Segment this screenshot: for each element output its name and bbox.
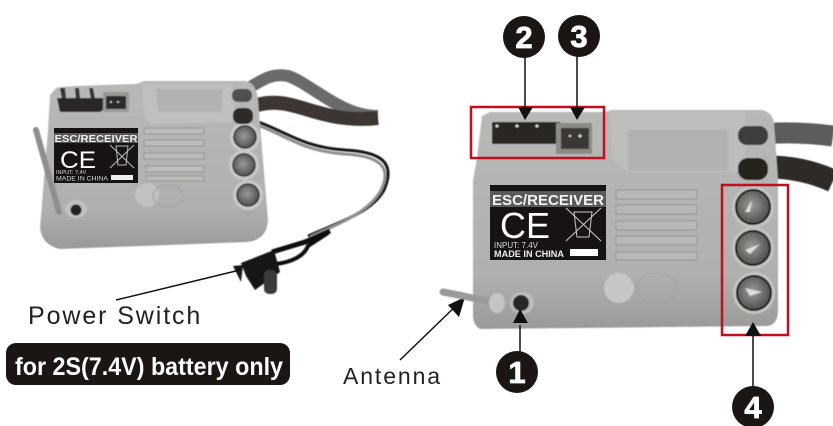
callout 1	[496, 309, 538, 393]
right device body	[473, 110, 778, 329]
left wire stubs	[232, 89, 253, 124]
right label	[490, 185, 606, 260]
right device wires	[745, 133, 833, 181]
callout 3	[558, 15, 600, 120]
callout 2	[503, 16, 545, 120]
left round button	[135, 183, 183, 207]
right connector pins	[492, 122, 592, 154]
right label: ESC/RECEIVER	[492, 192, 604, 209]
battery badge: for 2S(7.4V) battery only	[15, 353, 283, 381]
antenna caption: Antenna	[343, 363, 442, 389]
left top cover block	[142, 84, 235, 124]
callout 1: 1	[508, 355, 526, 390]
arrow: power switch pointer	[116, 270, 240, 300]
left antenna	[36, 130, 87, 218]
right label: MADE IN CHINA	[494, 249, 565, 259]
right device: receiver detail	[443, 110, 833, 329]
left device wires	[238, 75, 388, 264]
battery badge	[6, 343, 290, 385]
arrow: antenna pointer	[400, 297, 465, 360]
red box: LEDs	[722, 185, 788, 335]
callout 2: 2	[515, 20, 533, 55]
right label: CE	[500, 205, 550, 246]
right antenna and power socket	[443, 292, 534, 314]
right label: INPUT: 7.4V	[494, 241, 539, 250]
left label: ESC/RECEIVER	[54, 133, 138, 145]
callout 4: 4	[744, 390, 762, 425]
callout 4	[732, 322, 774, 426]
right LEDs	[732, 186, 775, 314]
left label: INPUT: 7.4V	[56, 170, 87, 176]
power switch	[233, 250, 280, 294]
right wire stubs	[738, 126, 768, 180]
callout 3: 3	[570, 19, 588, 54]
left label: MADE IN CHINA	[56, 176, 108, 182]
left connector pins	[57, 88, 129, 112]
power switch caption: Power Switch	[28, 302, 202, 330]
left label: CE	[60, 147, 96, 174]
left vents	[144, 128, 204, 181]
right top cover block	[610, 112, 745, 172]
red box: connectors	[471, 107, 604, 158]
right round button	[604, 273, 677, 303]
right vents	[616, 190, 697, 260]
left device body	[40, 81, 268, 249]
left LEDs	[229, 122, 263, 210]
left device: receiver with power switch	[36, 75, 388, 294]
left label	[54, 128, 138, 183]
